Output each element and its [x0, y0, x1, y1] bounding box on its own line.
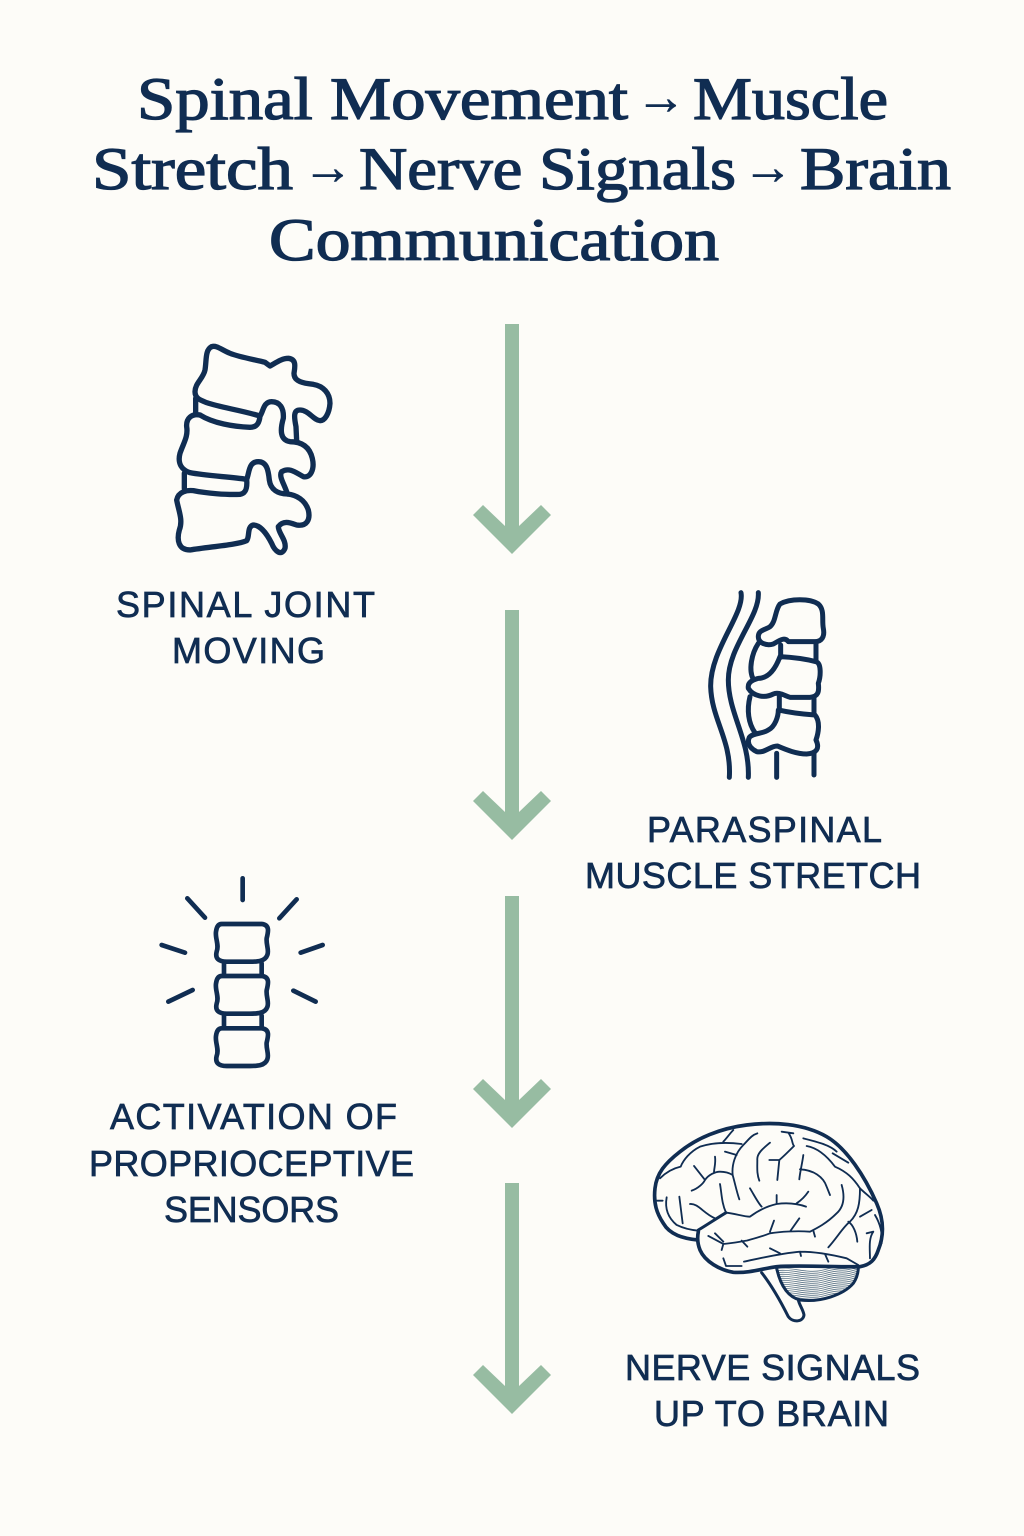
- title: →: [743, 139, 793, 195]
- label: activation of proprioceptive sensors: PROPRIOCEPTIVE: [89, 1143, 414, 1184]
- title: Nerve Signals: [359, 136, 736, 202]
- icon: paraspinal muscle: [711, 593, 824, 777]
- arrow 2: [473, 610, 551, 840]
- label: activation of proprioceptive sensors: [89, 1096, 414, 1230]
- brain outline: [655, 1124, 883, 1272]
- title: Communication: [269, 207, 719, 273]
- title: Stretch: [92, 136, 293, 202]
- cerebellum outline: [777, 1267, 858, 1301]
- brain stem: [762, 1273, 804, 1321]
- label: spinal joint moving: [116, 584, 375, 671]
- label: paraspinal muscle stretch: MUSCLE STRETCH: [585, 855, 921, 896]
- brain folds: [655, 1130, 882, 1266]
- label: paraspinal muscle stretch: PARASPINAL: [647, 809, 882, 850]
- label: activation of proprioceptive sensors: SENSORS: [164, 1189, 339, 1230]
- arrow 1: [473, 324, 551, 554]
- title: [92, 66, 951, 273]
- label: spinal joint moving: SPINAL JOINT: [116, 584, 375, 625]
- arrow 3: [473, 896, 551, 1128]
- label: nerve signals up to brain: UP TO BRAIN: [654, 1393, 889, 1434]
- title: →: [303, 139, 353, 195]
- label: nerve signals up to brain: [625, 1347, 920, 1434]
- cerebellum hatching: [778, 1268, 857, 1299]
- label: paraspinal muscle stretch: [585, 809, 921, 896]
- icon: brain: [655, 1124, 883, 1321]
- icon: spinal joint: [177, 346, 330, 553]
- title: Muscle: [693, 66, 888, 132]
- label: activation of proprioceptive sensors: ACTIVATION OF: [110, 1096, 397, 1137]
- arrow 4: [473, 1183, 551, 1414]
- title: Brain: [800, 136, 951, 202]
- icon: activated vertebrae with rays: [162, 878, 323, 1066]
- title: Spinal Movement: [137, 66, 628, 132]
- label: spinal joint moving: MOVING: [172, 630, 325, 671]
- label: nerve signals up to brain: NERVE SIGNALS: [625, 1347, 920, 1388]
- title: →: [636, 69, 686, 125]
